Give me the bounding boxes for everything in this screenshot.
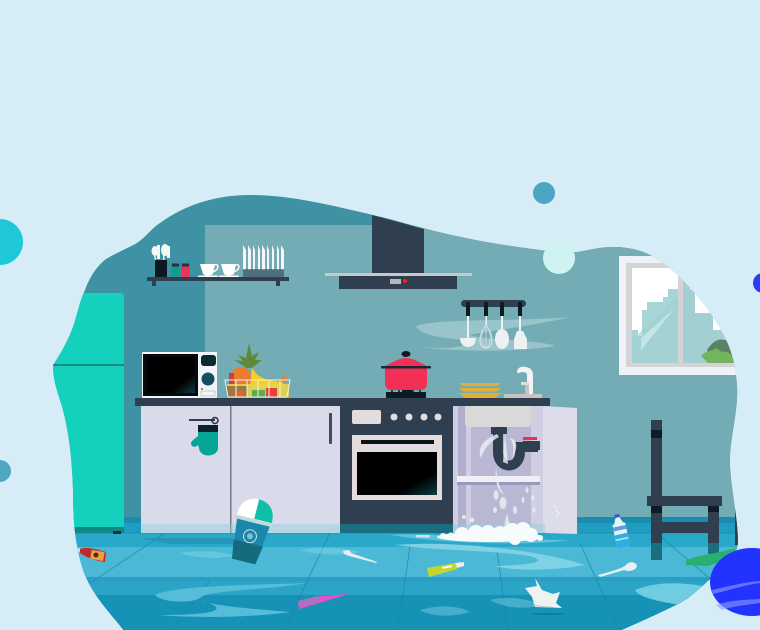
ketchup bottle (76, 547, 106, 562)
microwave (142, 352, 217, 398)
wall shelf with utensils, jars, cups and plates (147, 244, 289, 286)
water bottle (610, 513, 630, 549)
water reflections (155, 583, 307, 602)
basket wire (225, 380, 290, 397)
floor (40, 517, 750, 630)
foam splash (416, 522, 543, 545)
open sink cabinet with leaking pipe (453, 406, 577, 534)
drain pipe (491, 427, 540, 466)
decorative circle: pale mint (543, 242, 575, 274)
jar red (181, 264, 190, 277)
bananas (250, 367, 286, 388)
shrub in window (701, 339, 735, 363)
decorative circle: left blue-grey (0, 460, 11, 482)
sink basin (465, 406, 531, 427)
cup two (219, 264, 239, 277)
spoon (598, 562, 637, 577)
back wall (40, 190, 750, 535)
cabinet door (543, 406, 577, 534)
yellow tube (427, 562, 464, 577)
fork on floor (343, 550, 377, 563)
fruit basket (225, 343, 290, 397)
plate rack (243, 245, 284, 277)
water leak (462, 433, 536, 530)
decorative circle: left cyan (0, 219, 23, 265)
basket contents (227, 384, 289, 397)
oven (340, 406, 453, 533)
wall lighter panel (205, 225, 750, 535)
crumpled paper (525, 578, 566, 615)
decorative circle: right blue (753, 273, 760, 293)
kitchen scene clipped to blob (40, 190, 750, 630)
decorative blob: bottom right blue (710, 548, 760, 616)
floating cup with lid (225, 495, 278, 566)
shelf board (147, 277, 289, 286)
range hood (325, 215, 472, 289)
countertop (135, 398, 550, 406)
faucet (504, 367, 542, 398)
purple comb (298, 594, 349, 609)
green rag (686, 548, 738, 566)
utensil pot (152, 244, 170, 277)
fridge (53, 293, 124, 534)
cup one (198, 264, 218, 277)
shelf inside cabinet (457, 476, 540, 482)
illustration: flooded kitchen (0, 182, 760, 630)
decorative circle: top blue (533, 182, 555, 204)
far chair edge (735, 509, 738, 545)
hanging utensils rail (416, 300, 571, 351)
cooking pot on burner (381, 351, 431, 398)
water tint over cabinets (141, 524, 545, 533)
oven mitt (189, 418, 218, 456)
jar teal (171, 264, 180, 277)
pineapple (235, 343, 262, 368)
water ripple over blue blob (712, 581, 760, 610)
stack of yellow plates (459, 383, 501, 398)
lower cabinets with oven mitt (141, 406, 340, 533)
window (619, 256, 744, 375)
dining chair (647, 420, 722, 560)
